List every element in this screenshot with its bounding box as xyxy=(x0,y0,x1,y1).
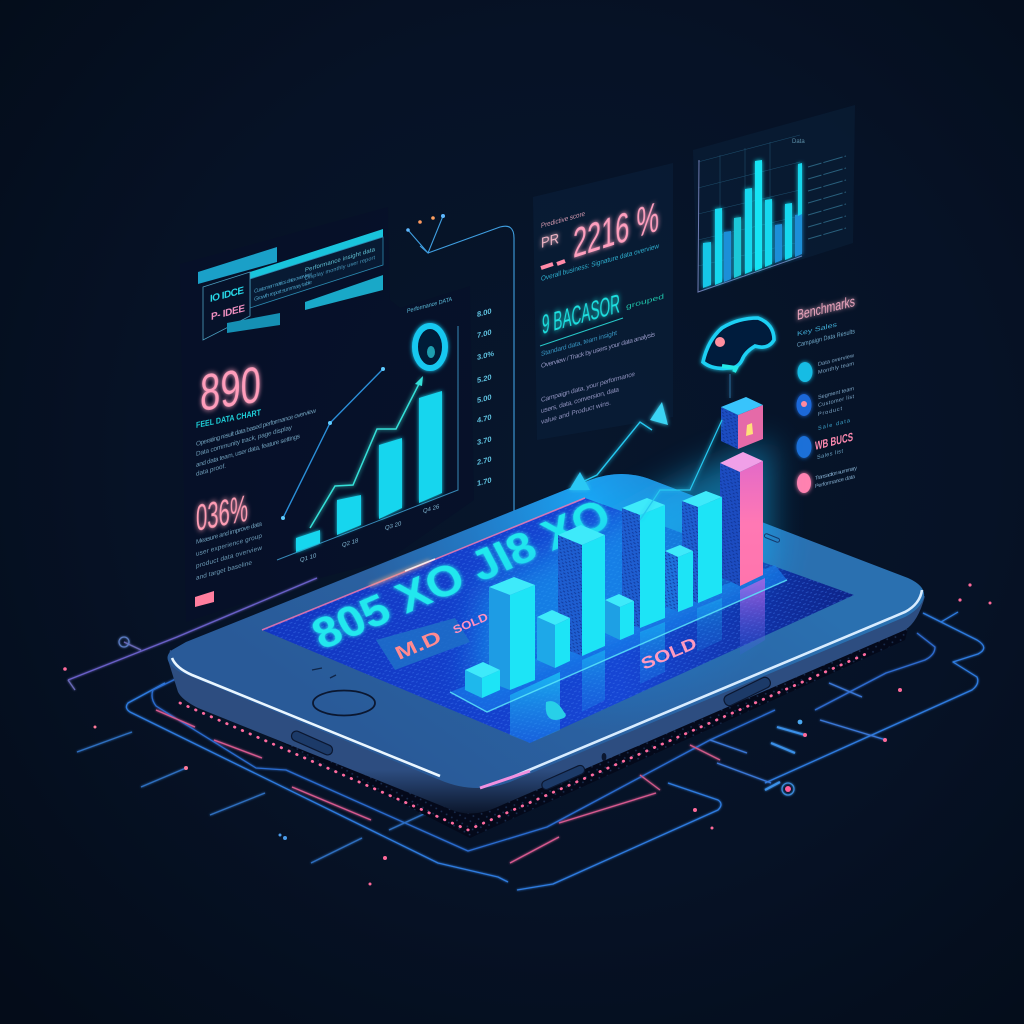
LED dots row xyxy=(180,653,868,830)
legend title: Data xyxy=(792,139,805,145)
shadow base xyxy=(175,620,910,838)
y value column: 7.00 xyxy=(477,327,492,340)
x labels xyxy=(300,503,440,564)
top slot xyxy=(764,533,780,543)
tablet body side xyxy=(168,596,925,814)
panel: middle stats xyxy=(533,163,673,440)
list item 4: Performance data xyxy=(815,474,856,490)
panel: left dashboard xyxy=(180,207,474,622)
bar 9 pink xyxy=(720,452,763,586)
text block: stat description: data proof. xyxy=(196,463,226,478)
grid xyxy=(698,135,800,285)
axes xyxy=(277,326,458,560)
bar 3 xyxy=(537,610,570,668)
chart base strip xyxy=(450,565,787,712)
label: PR: PR xyxy=(541,230,559,252)
bar 2 xyxy=(489,577,535,690)
small teal label: grouped xyxy=(626,292,664,311)
y value column: 4.70 xyxy=(477,412,492,425)
text block: stat description: Operating result data based performance overview xyxy=(196,407,316,448)
text block: middle description: Campaign data, your performance xyxy=(541,371,635,404)
panel: right metrics list xyxy=(796,293,857,493)
text block: middle description: Overview / Track by users your data analysis xyxy=(541,331,656,370)
chart base highlight xyxy=(450,580,787,712)
chart title: Performance DATA xyxy=(407,296,453,315)
list item 1 xyxy=(798,353,855,382)
list item 2: Customer list xyxy=(818,394,854,409)
header widgets xyxy=(198,229,383,340)
chart: left bar and line chart xyxy=(277,296,494,564)
home button xyxy=(313,690,375,716)
label: stat caption: FEEL DATA CHART xyxy=(196,407,262,430)
axis xyxy=(698,160,802,292)
header widgets: Performance insight data xyxy=(305,246,376,274)
screen small icon xyxy=(546,701,566,720)
x labels: Q4 26 xyxy=(423,503,440,515)
y value column: 1.70 xyxy=(477,475,492,488)
bezel top glow xyxy=(168,474,924,788)
list item 3 xyxy=(796,418,853,461)
text block: middle description xyxy=(541,330,656,426)
heading: 9 BACASOR: 9 BACASOR xyxy=(542,289,620,341)
badge: M.D: M.D xyxy=(391,626,445,664)
y value column: 5.20 xyxy=(477,372,492,385)
text block: middle description: users, data, conversion, data xyxy=(541,386,619,415)
side port right xyxy=(722,676,772,707)
line series: cyan with arrow xyxy=(310,376,423,528)
badge: M.D xyxy=(376,618,470,670)
bars xyxy=(296,391,442,552)
underline xyxy=(540,318,623,346)
list item 3: Sales list xyxy=(817,448,843,461)
x labels: Q1 10 xyxy=(300,552,317,564)
y value column: 8.00 xyxy=(477,306,492,319)
camera hole xyxy=(602,753,606,761)
y value column: 3.0% xyxy=(477,349,494,362)
header widgets: Display monthly user report xyxy=(305,255,375,282)
text block: stat description: Data community track, page display xyxy=(196,424,293,458)
speaker marks xyxy=(312,668,336,678)
list item 4: Transaction summary xyxy=(815,466,857,482)
text block: second description: Measure and improve data xyxy=(196,521,262,546)
pink dash marks xyxy=(541,261,565,268)
list item 1: Data overview xyxy=(818,353,855,368)
text block: second description: product data overview xyxy=(196,545,262,570)
circuit node dots xyxy=(63,583,991,886)
text block: middle description: value and Product wins. xyxy=(541,399,611,426)
text block: middle description: Standard data, team insight xyxy=(541,330,617,358)
highlight rim xyxy=(172,658,440,776)
text block: stat description: and data team, user data, feature settings xyxy=(196,433,301,469)
side port bottom xyxy=(540,764,586,791)
header widgets: P- IDEE xyxy=(211,303,245,323)
list item 2: Segment team xyxy=(818,386,854,401)
panel: right metrics list: Campaign Data Results xyxy=(797,328,856,349)
list item 3: WB BUCS xyxy=(815,430,853,453)
caption under stat: Overall business: Signature data overview xyxy=(541,242,660,283)
y value column: 3.70 xyxy=(477,434,492,447)
donut gauge xyxy=(415,326,445,368)
bar 6 xyxy=(622,498,665,628)
text block: second description xyxy=(196,521,262,582)
x labels: Q3 20 xyxy=(385,520,402,532)
glow behind bars xyxy=(470,440,770,690)
bar reflections xyxy=(510,578,765,743)
list item 3: Sale data xyxy=(818,418,851,432)
y value column xyxy=(477,306,494,488)
circuit traces xyxy=(68,578,984,890)
badge: SOLD lower: SOLD xyxy=(638,634,700,674)
x labels: Q2 18 xyxy=(342,537,359,549)
legend lines xyxy=(808,156,846,239)
3D bars xyxy=(465,397,763,698)
line series: blue xyxy=(281,367,385,520)
list item 2: Product xyxy=(818,406,842,418)
icon: cloud xyxy=(703,318,774,398)
bar 1 xyxy=(465,662,500,698)
rising trend line with arrows xyxy=(569,402,722,520)
bar 7 xyxy=(665,545,693,612)
bar 8 xyxy=(682,491,722,603)
tablet top surface xyxy=(168,474,924,788)
text block: stat description xyxy=(196,407,316,478)
text block: second description: and target baseline xyxy=(196,559,252,582)
subtext: Key Sales xyxy=(797,321,838,338)
list item 2 xyxy=(796,386,854,418)
stat: 036%: 036% xyxy=(196,488,248,540)
badge: SOLD small: SOLD xyxy=(451,610,490,636)
bars xyxy=(703,160,802,288)
connector: funnel node and riser line xyxy=(406,214,514,545)
bar 5 xyxy=(605,594,634,640)
header widgets: IO IDCE xyxy=(210,285,244,305)
screen xyxy=(262,498,854,743)
header widgets: Customer metrics data overview xyxy=(254,271,313,295)
side port left xyxy=(290,729,334,757)
bar 4 xyxy=(558,525,605,656)
text block: second description: user experience group xyxy=(196,533,262,558)
list item 4 xyxy=(797,466,857,493)
stat: 890: 890 xyxy=(200,355,261,422)
list item 1: Monthly team xyxy=(818,361,854,376)
tablet xyxy=(168,397,925,838)
stat: 2216 %: 2216 % xyxy=(573,193,659,267)
panel: top right bar chart xyxy=(693,105,855,293)
pink marker xyxy=(195,591,214,607)
header widgets: Growth report summary table xyxy=(254,280,312,303)
cube xyxy=(721,397,763,449)
heading: Benchmarks xyxy=(797,293,855,324)
y value column: 2.70 xyxy=(477,454,492,467)
small label: Predictive score xyxy=(541,210,585,230)
screen headline number: 805 XO JI8 XO xyxy=(304,491,619,659)
y value column: 5.00 xyxy=(477,392,492,405)
